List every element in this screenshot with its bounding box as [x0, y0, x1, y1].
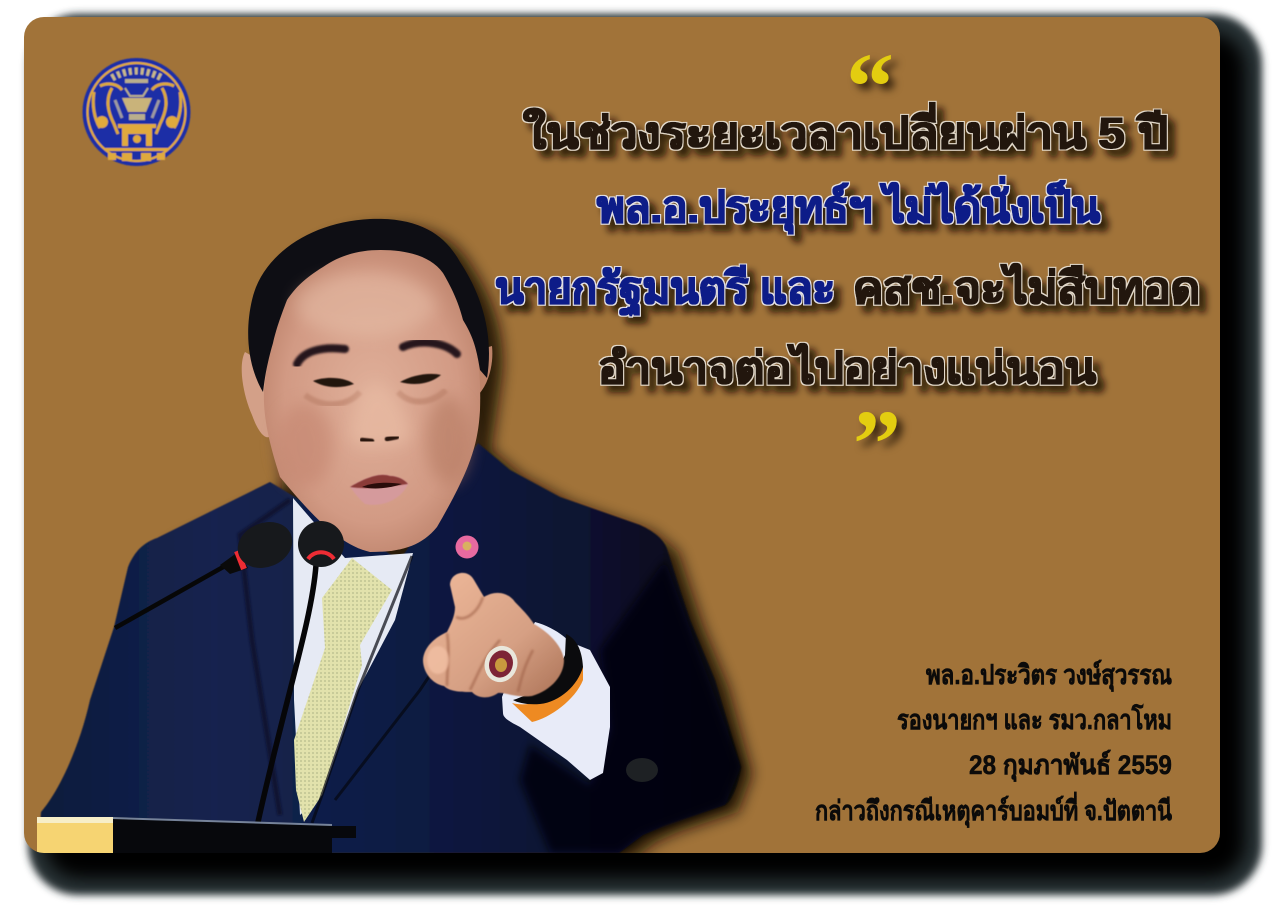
ring [484, 646, 518, 682]
seal lions [93, 84, 181, 134]
mouth [350, 484, 408, 505]
seal pedestal [118, 124, 156, 146]
seal urn [122, 79, 152, 120]
headline quote [495, 102, 1200, 393]
shirt [293, 498, 413, 815]
wristband orange [512, 667, 583, 722]
attribution block [815, 659, 1172, 828]
eyes [313, 374, 441, 387]
seal base row [105, 148, 168, 161]
cheek shading left [277, 403, 333, 487]
wristband black [513, 634, 583, 704]
headline line 3 dark: คสช.จะไม่สืบทอด [853, 262, 1200, 313]
thumb highlight [427, 646, 449, 674]
date: 28 กุมภาพันธ์ 2559 [969, 749, 1172, 782]
left ear [242, 352, 272, 437]
headline line 1: ในช่วงระยะเวลาเปลี่ยนผ่าน 5 ปี [523, 102, 1168, 158]
speaker role: รองนายกฯ และ รมว.กลาโหม [897, 703, 1172, 735]
dark sleeve [520, 560, 741, 853]
nostrils [362, 437, 397, 441]
forehead highlight [295, 273, 435, 337]
seal flame row [112, 71, 162, 78]
lapel pin [456, 536, 478, 558]
seal orbs [96, 116, 108, 128]
headline line 3 blue: นายกรัฐมนตรี และ [495, 264, 835, 316]
hair [248, 219, 489, 392]
opening quote mark: “ [846, 33, 894, 140]
eye bags [305, 390, 446, 404]
microphone right [258, 521, 344, 822]
speaker name: พล.อ.ประวิตร วงษ์สุวรรณ [926, 659, 1172, 692]
figure shadow [268, 216, 761, 853]
seal gold ring [88, 63, 186, 161]
suit jacket [38, 443, 741, 853]
eyebrows [297, 343, 457, 364]
necktie [294, 558, 392, 822]
lapel fold lines [310, 556, 430, 824]
left lapel fold [240, 500, 290, 815]
portrait of speaker at podium [37, 219, 752, 860]
jacket button [626, 758, 658, 782]
microphone left [115, 514, 299, 628]
government seal logo [82, 58, 190, 166]
headline line 2: พล.อ.ประยุทธ์ฯ ไม่ได้นั่งเป็น [597, 176, 1100, 235]
right ear [478, 346, 492, 395]
finger creases [447, 597, 533, 692]
cheek shading right [426, 396, 470, 484]
pointing hand [423, 573, 564, 697]
headline line 4: อำนาจต่อไปอย่างแน่นอน [598, 342, 1096, 393]
podium [37, 817, 356, 853]
facial features [277, 273, 470, 505]
context: กล่าวถึงกรณีเหตุคาร์บอมบ์ที่ จ.ปัตตานี [815, 791, 1172, 828]
seal disc [82, 58, 190, 166]
closing quote mark: ” [853, 390, 901, 497]
nose [353, 392, 408, 446]
face [264, 248, 480, 552]
shirt cuff [502, 622, 610, 780]
